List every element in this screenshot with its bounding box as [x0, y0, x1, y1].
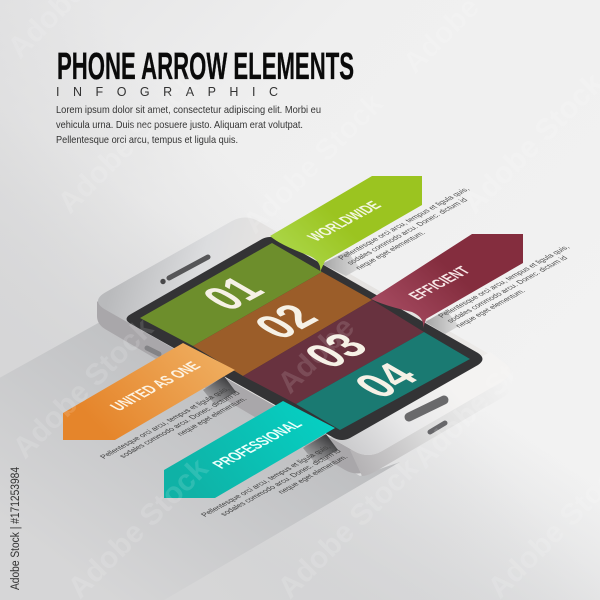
stock id: Adobe Stock | #171253984 [10, 466, 22, 590]
phone bottom lit face [330, 352, 510, 455]
intro paragraph: Lorem ipsum dolor sit amet, consectetur adipiscing elit. Morbi eu [56, 104, 321, 116]
arrow ribbon: professional [164, 401, 335, 498]
ribbon shadows [203, 251, 459, 463]
arrow ribbon: efficient: EFFICIENT [404, 264, 475, 302]
description: professional: neque eget elementum. [276, 454, 350, 495]
band 03 maroon [243, 300, 424, 404]
subtitle: INFOGRAPHIC [56, 85, 278, 99]
earpiece speaker [169, 257, 208, 278]
description: efficient: Pellentesque orci arcu, tempus et ligula quis, [436, 244, 571, 319]
watermarks: Adobe [272, 311, 361, 400]
camera dot [160, 279, 166, 284]
phone top face [98, 218, 510, 455]
arrow ribbon: worldwide [270, 176, 422, 272]
arrow ribbon: professional: PROFESSIONAL [208, 417, 307, 471]
shadow under maroon ribbon [425, 310, 459, 334]
arrow ribbon: efficient [371, 234, 523, 328]
phone body [97, 218, 513, 476]
description: united as one: neque eget elementum. [175, 396, 249, 437]
title: PHONE ARROW ELEMENTS [57, 46, 354, 88]
screen bezel [126, 237, 482, 440]
description: professional: Pellentesque orci arcu, tempus et ligula quis, [199, 444, 333, 518]
watermarks: Adobe Stock [7, 312, 160, 465]
description: efficient: sodales commodo arcu. Donec. dictum id [445, 255, 570, 324]
shadow under green ribbon [322, 251, 360, 276]
watermarks: Adobe Stock [52, 67, 205, 220]
intro paragraph: vehicula urna. Duis nec posuere justo. Aliquam erat volutpat. [56, 119, 303, 131]
phone cast shadow [0, 322, 400, 600]
arrow ribbon: united as one [63, 343, 235, 440]
phone right side face [350, 372, 513, 476]
phone left side face [97, 290, 380, 474]
home button [409, 400, 444, 417]
number 03: 03 [292, 326, 380, 375]
description: efficient: neque eget elementum. [453, 288, 528, 329]
screen bands [140, 243, 470, 430]
band 02 brown [193, 272, 372, 376]
left side slot [147, 348, 159, 354]
description: united as one: Pellentesque orci arcu, tempus et ligula quis, [98, 386, 232, 460]
watermarks: Adobe Stock [407, 322, 560, 475]
shadow under orange ribbon [203, 376, 236, 405]
description: worldwide: sodales commodo arcu. Donec. dictum id [345, 197, 470, 266]
number 04: 04 [342, 356, 430, 405]
arrow ribbon: united as one: UNITED AS ONE [106, 359, 205, 413]
description: professional: sodales commodo arcu. Donec. dictum id [218, 448, 343, 517]
intro paragraph: Pellentesque orci arcu, tempus et ligula quis. [56, 134, 238, 146]
number 02: 02 [242, 297, 330, 346]
arrow ribbon: worldwide: WORLDWIDE [303, 199, 386, 244]
band 04 teal [296, 332, 470, 430]
description: united as one: sodales commodo arcu. Donec. dictum id [117, 390, 242, 459]
band 01 green [140, 243, 322, 346]
number 01: 01 [190, 270, 276, 317]
watermarks: Adobe Stock [237, 87, 390, 240]
bottom side slot [430, 423, 445, 432]
description: worldwide: Pellentesque orci arcu, tempus et ligula quis, [336, 186, 471, 261]
shadow under teal ribbon [303, 434, 338, 463]
description: worldwide: neque eget elementum. [353, 230, 428, 271]
intro paragraph [56, 104, 321, 146]
